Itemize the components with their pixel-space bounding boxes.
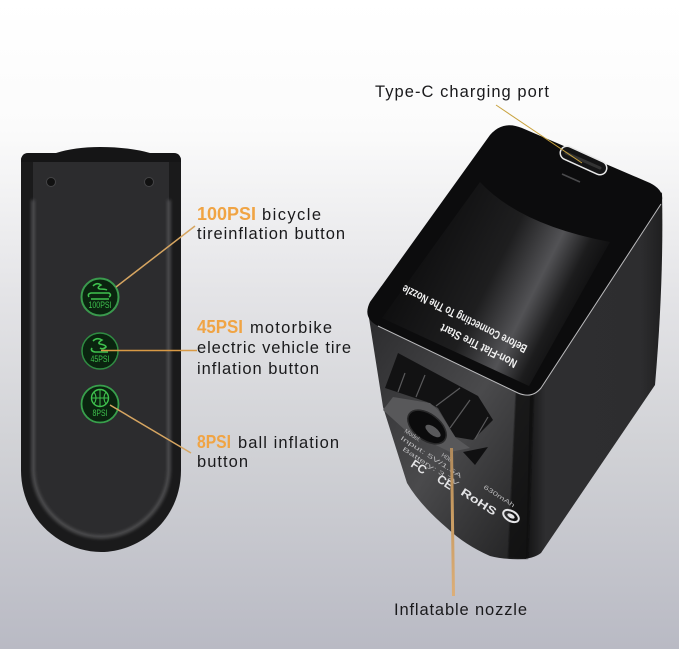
certification marks: CE (434, 472, 456, 493)
label: 8PSI line 2: button (197, 453, 248, 471)
spec label text: Battery: 3.7V (401, 447, 460, 488)
nozzle wedge (463, 447, 488, 465)
arrow: 45PSI leader (101, 350, 197, 352)
certification marks: FC (408, 457, 430, 477)
device left face (369, 318, 530, 559)
screw left (46, 178, 56, 186)
recessed panel (382, 182, 610, 386)
label: nozzle: Inflatable nozzle (394, 601, 527, 619)
device printed text: Before Connecting To The Nozzle (399, 282, 529, 356)
label: 100PSI: 100PSI (197, 204, 256, 224)
remote top cap (21, 147, 181, 162)
charging port (566, 153, 600, 168)
arrow: nozzle leader (450, 448, 455, 596)
device top face (367, 125, 662, 395)
spec label text: 630mAh (482, 485, 515, 509)
device corner shading (508, 388, 534, 559)
certification marks (408, 457, 521, 525)
label: 45PSI: 45PSI (197, 317, 243, 337)
device printed text (399, 282, 529, 371)
nozzle hole (402, 403, 452, 451)
remote bevel highlight (33, 200, 169, 537)
label: 45PSI line 3: inflation button (197, 360, 319, 378)
remote inner plate (33, 162, 169, 537)
label: 45PSI: motorbike (250, 319, 332, 337)
top face edge highlight (378, 204, 661, 395)
label: Type-C: Type-C charging port (375, 83, 549, 101)
arrow: 8PSI leader (110, 405, 191, 453)
button: 45PSI (82, 333, 118, 369)
panel: remote control (21, 147, 181, 552)
button: 8PSI: 8PSI (92, 408, 108, 418)
remote body (21, 155, 181, 552)
device right face (520, 192, 662, 559)
button: 100PSI: 100PSI (88, 300, 112, 310)
button: 100PSI (82, 278, 118, 316)
nozzle plate (383, 397, 470, 452)
label: 45PSI line 2: electric vehicle tire (197, 339, 351, 357)
device printed text: Non-Flat Tire Start (438, 321, 519, 371)
spec label text: Input: 5V/1.5A (399, 436, 463, 480)
certification marks: RoHS (458, 486, 498, 518)
spec label text: Model: (403, 429, 422, 444)
label: 8PSI: ball inflation (238, 434, 339, 452)
label: 8PSI: 8PSI (197, 432, 231, 452)
arrow: Type-C leader (496, 105, 582, 163)
button: 45PSI: 45PSI (90, 354, 110, 364)
spec label text: H08 (440, 453, 453, 464)
screw right (144, 178, 154, 186)
panel: pump device (367, 125, 662, 559)
arrow: 100PSI leader (116, 226, 195, 287)
nozzle knob (383, 353, 493, 465)
label: 100PSI line 2: tireinflation button (197, 225, 345, 243)
port indicator slot (562, 174, 580, 182)
label: 100PSI: bicycle (262, 206, 321, 224)
button: 8PSI (82, 386, 118, 422)
spec label text (399, 429, 515, 509)
